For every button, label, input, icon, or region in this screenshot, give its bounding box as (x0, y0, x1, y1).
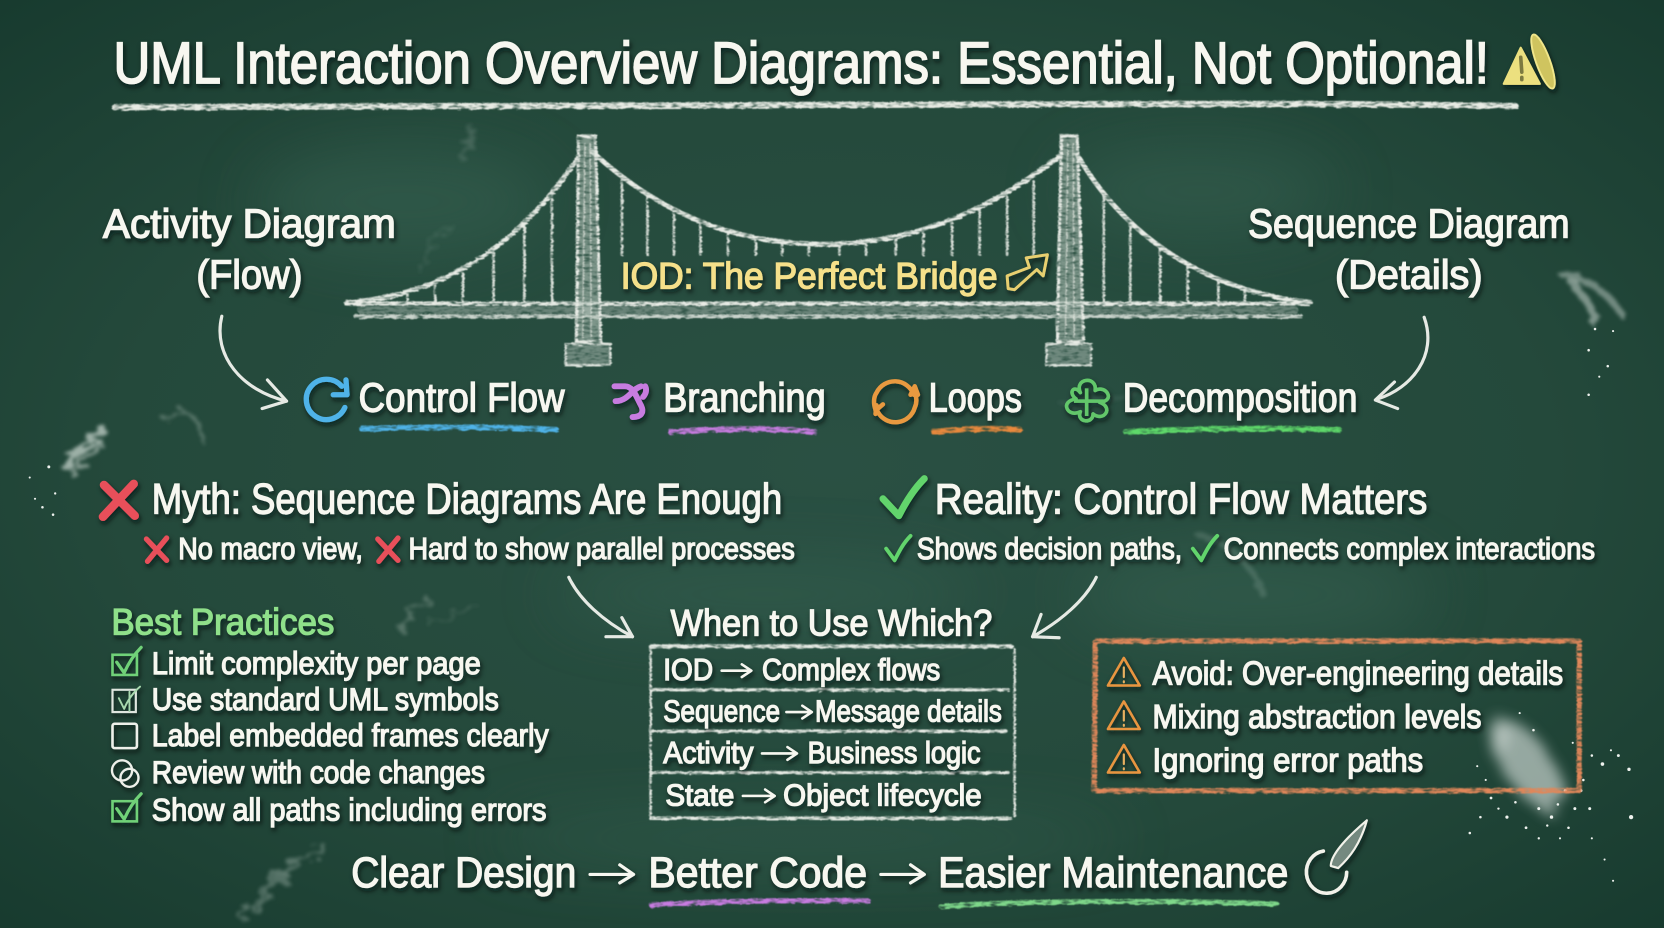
avoid items: Avoid: Over-engineering details (1152, 654, 1563, 691)
label: activity diagram: Activity Diagram (103, 201, 396, 247)
bridge cables (347, 151, 1311, 302)
item: show all paths: Show all paths including errors (152, 791, 547, 827)
icon: warning triangle with chalk stick (1504, 32, 1559, 91)
item: limit complexity: Limit complexity per page (152, 645, 481, 681)
title underline (115, 104, 1515, 107)
underline: control flow (362, 427, 556, 430)
arrow: activity to control flow (220, 316, 287, 409)
item: review: Review with code changes (152, 754, 485, 790)
title: UML Interaction Overview Diagrams: Essential, Not Optional! (114, 31, 1489, 96)
footer underline: easier maintenance (941, 902, 1277, 906)
table heading: When to Use Which? (671, 602, 992, 644)
table rows: Activity (663, 735, 754, 770)
reality points: Connects complex interactions (1224, 531, 1595, 566)
icon: green check (883, 479, 924, 516)
feature: loops: Loops (929, 375, 1022, 421)
table rows: Object lifecycle (783, 777, 982, 812)
icon: clover (1067, 380, 1108, 421)
label: sequence diagram: Sequence Diagram (1248, 201, 1570, 247)
table rows: Complex flows (762, 652, 940, 687)
avoid items: Mixing abstraction levels (1152, 698, 1481, 735)
footer slogan: Better Code (648, 849, 867, 896)
icon: crossing paths (614, 386, 646, 417)
underline: loops (934, 429, 1020, 432)
label: sequence diagram (1248, 201, 1570, 298)
myth points: No macro view, (178, 531, 363, 566)
underline: branching (671, 429, 815, 432)
arrow: reality to table (1033, 577, 1096, 638)
suspension bridge (346, 136, 1311, 365)
item: label frames: Label embedded frames clearly (152, 717, 549, 753)
icon: chalk circle and pencil (1306, 820, 1367, 893)
orange frame (1094, 641, 1579, 791)
feature: branching: Branching (663, 375, 826, 421)
table rows: Message details (815, 694, 1002, 729)
footer slogan: Clear Design (351, 849, 576, 896)
arrow (590, 865, 634, 883)
panel: when to use which (651, 602, 1015, 818)
footer slogan (351, 849, 1288, 896)
item: standard symbols: Use standard UML symbols (152, 681, 499, 717)
feature: control flow: Control Flow (359, 375, 565, 421)
table rows (663, 652, 1002, 812)
avoid items: Ignoring error paths (1152, 741, 1423, 778)
table rows: IOD (663, 652, 713, 687)
icon: red cross (103, 484, 135, 517)
bridge left tower (566, 136, 610, 365)
icon: loop arrows (874, 381, 918, 422)
panel: avoid (1094, 641, 1579, 791)
footer slogan: Easier Maintenance (938, 849, 1288, 896)
table rows: State (665, 777, 734, 812)
bridge hangers (408, 180, 1245, 305)
panel: reality (883, 476, 1595, 566)
arrow (881, 865, 924, 883)
panel: myth (103, 476, 795, 566)
avoid items (1108, 654, 1563, 778)
best practices heading: Best Practices (111, 601, 334, 643)
feature: loops (874, 375, 1022, 422)
panel: best practices (111, 601, 549, 827)
reality heading: Reality: Control Flow Matters (935, 476, 1427, 523)
arrow: sequence to decomposition (1375, 317, 1428, 409)
myth heading: Myth: Sequence Diagrams Are Enough (152, 476, 782, 523)
label: activity diagram (103, 201, 396, 298)
underline: decomposition (1126, 429, 1339, 432)
myth points (146, 531, 795, 566)
bridge label: IOD: The Perfect Bridge (621, 255, 998, 297)
feature: decomposition: Decomposition (1123, 375, 1357, 421)
bridge deck (346, 303, 1310, 316)
label: activity diagram: (Flow) (196, 252, 302, 298)
table rows: Sequence (663, 694, 780, 729)
table rows: Business logic (808, 735, 981, 770)
myth points: Hard to show parallel processes (409, 531, 795, 566)
footer underline: better code (652, 901, 868, 905)
arrow: myth to table (569, 577, 632, 637)
icon: refresh (306, 379, 347, 420)
table frame (651, 646, 1015, 818)
bridge right tower (1046, 136, 1091, 365)
icon: arrow pointing up-right (1007, 255, 1047, 290)
reality points (886, 531, 1595, 566)
reality points: Shows decision paths, (917, 531, 1182, 566)
label: sequence diagram: (Details) (1335, 252, 1483, 298)
